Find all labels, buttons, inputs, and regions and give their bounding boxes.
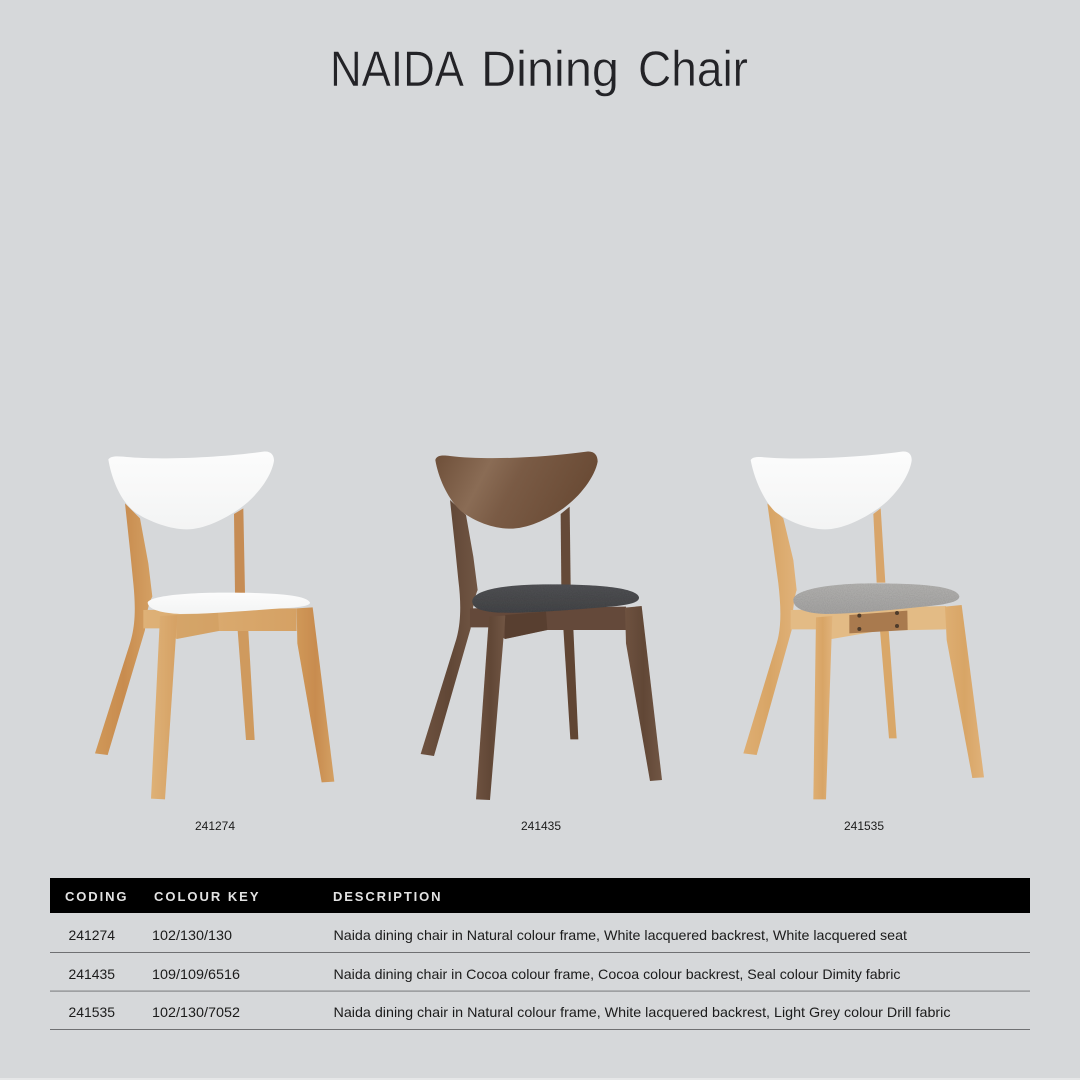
table header: COLOUR KEY xyxy=(154,889,259,904)
table row: 241535: Naida dining chair in Natural colour frame, White lacquered backrest, Light Grey colour Drill fabric xyxy=(334,1004,950,1020)
table row: 241274: 241274 xyxy=(68,927,115,943)
caption: 241274: 241274 xyxy=(195,819,235,833)
table row: 241435 xyxy=(50,966,1030,992)
table header xyxy=(50,878,1030,913)
title xyxy=(330,41,748,97)
chair photo: 241535 natural frame, light grey fabric seat xyxy=(743,452,984,799)
table row: 241435: 241435 xyxy=(68,966,115,982)
table header: DESCRIPTION xyxy=(333,889,440,904)
table row: 241435: Naida dining chair in Cocoa colour frame, Cocoa colour backrest, Seal colour Dimity fabric xyxy=(334,966,900,982)
title: Dining xyxy=(481,41,619,97)
table row: 241274: Naida dining chair in Natural colour frame, White lacquered backrest, White lacquered seat xyxy=(334,927,907,943)
table row: 241274 xyxy=(50,927,1030,953)
caption: 241435: 241435 xyxy=(521,819,561,833)
chair photo: 241435 cocoa frame, seal fabric seat xyxy=(421,452,662,800)
product table xyxy=(50,878,1030,1030)
table row: 241435: 109/109/6516 xyxy=(152,966,240,982)
table row: 241535: 241535 xyxy=(68,1004,115,1020)
table row: 241535: 102/130/7052 xyxy=(152,1004,240,1020)
title: Chair xyxy=(638,41,748,97)
table row: 241274: 102/130/130 xyxy=(152,927,232,943)
table header: CODING xyxy=(65,889,126,904)
title: NAIDA xyxy=(330,41,465,97)
caption: 241535: 241535 xyxy=(844,819,884,833)
table row: 241535 xyxy=(50,1004,1030,1030)
chair photo: 241274 natural frame, white seat xyxy=(95,452,334,799)
